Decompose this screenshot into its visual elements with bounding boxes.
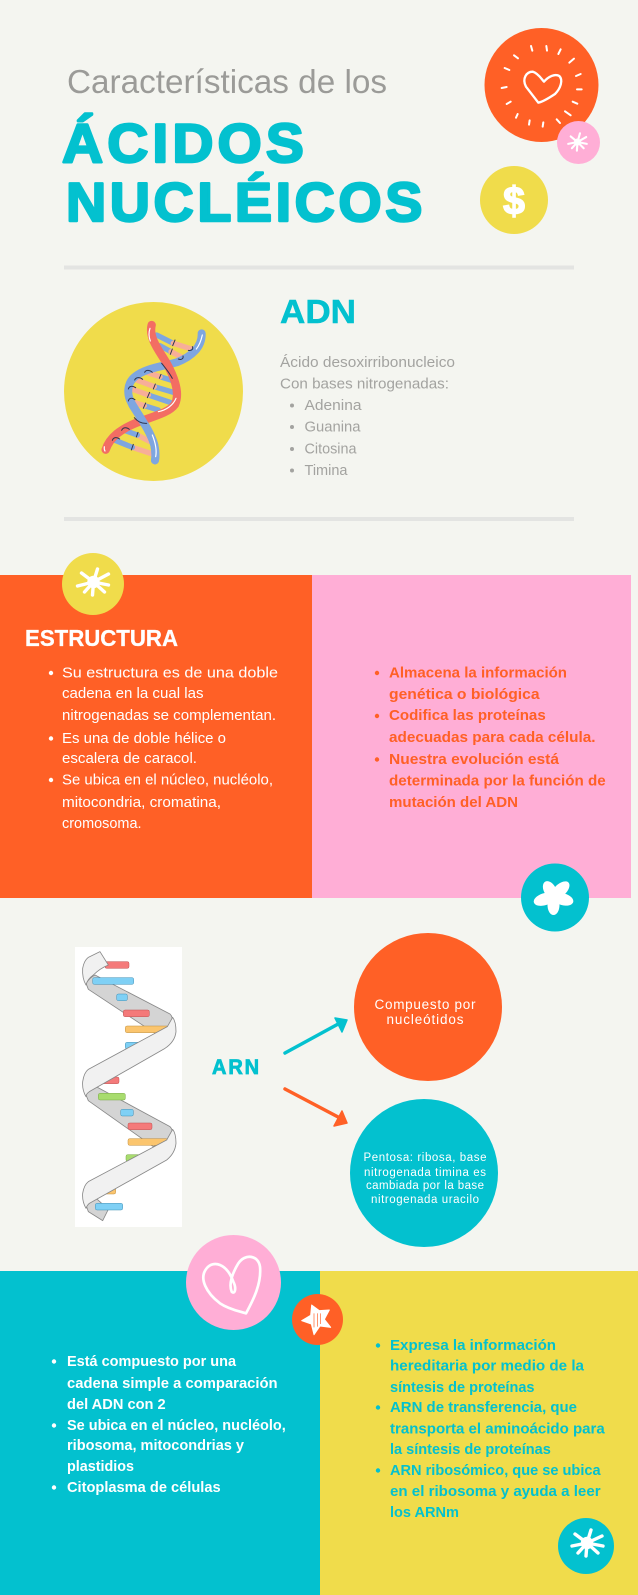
list: ARN funciones: transporta el aminoácido para — [390, 1421, 605, 1438]
icon: teal circle with spark — [558, 1518, 614, 1574]
list: ARN composición: del ADN con 2 — [67, 1396, 166, 1413]
list: ARN funciones: Expresa la información — [390, 1337, 556, 1354]
list: estructura: Su estructura es de una doble — [62, 665, 278, 682]
list: estructura: mitocondria, cromatina, — [62, 794, 221, 811]
panel: ARN composición — [0, 1271, 320, 1595]
list: ARN funciones: en el ribosoma y ayuda a leer — [390, 1483, 601, 1500]
list: funciones ADN: Almacena la información — [389, 665, 567, 682]
circle: pentosa: nitrogenada uracilo — [371, 1194, 479, 1206]
heading line 1: ÁCIDOS — [62, 112, 308, 174]
heading line 2: NUCLÉICOS — [66, 171, 426, 233]
list: funciones ADN: Codifica las proteínas — [389, 707, 546, 724]
red strand — [106, 325, 177, 450]
list: ARN composición: cadena simple a comparación — [67, 1375, 278, 1392]
list: ARN funciones: ARN ribosómico, que se ubica — [390, 1462, 601, 1479]
heading: ADN: ADN — [280, 293, 356, 330]
list: ARN composición: plastidios — [67, 1458, 134, 1475]
list: ARN composición — [52, 1353, 286, 1496]
circle: pentosa: Pentosa: ribosa, base — [364, 1152, 486, 1164]
list: ARN funciones: la síntesis de proteínas — [390, 1441, 551, 1458]
text block: ADN description: Guanina — [304, 418, 361, 435]
list: estructura: escalera de caracol. — [62, 750, 197, 767]
circle: pentosa: nitrogenada timina es — [364, 1167, 486, 1179]
list: ARN funciones: síntesis de proteínas — [390, 1379, 534, 1396]
panel: estructura — [0, 575, 312, 898]
panel: funciones ADN — [312, 575, 631, 898]
arrow: teal — [285, 1018, 347, 1053]
list: ARN funciones: los ARNm — [390, 1504, 459, 1521]
subtitle: Características de los — [67, 63, 387, 100]
list: ARN funciones: ARN de transferencia, que — [390, 1399, 577, 1416]
icon: yellow circle with dollar sign — [480, 166, 548, 234]
icon: yellow circle with spark — [62, 553, 124, 615]
text block: ADN description: Timina — [304, 462, 348, 479]
circle: compuesto por nucleótidos — [354, 933, 502, 1081]
list: ARN funciones: hereditaria por medio de la — [390, 1358, 585, 1374]
text block: ADN description: Ácido desoxirribonucleico — [280, 354, 455, 371]
list: ARN funciones — [376, 1337, 605, 1521]
panel: ARN funciones — [320, 1271, 638, 1595]
circle: pentosa: cambiada por la base — [366, 1180, 484, 1192]
illustration: RNA ribbon — [75, 947, 182, 1227]
list: estructura: Es una de doble hélice o — [62, 730, 226, 747]
icon: pink circle with heart — [186, 1235, 281, 1330]
text block: ADN description — [280, 354, 455, 479]
list: estructura: Se ubica en el núcleo, nucléolo, — [62, 771, 273, 788]
circle: pentosa — [350, 1099, 498, 1247]
list: funciones ADN: Nuestra evolución está — [389, 751, 560, 768]
icon: teal circle with flower — [521, 864, 589, 932]
list: funciones ADN: mutación del ADN — [389, 794, 518, 811]
text block: ADN description: Citosina — [304, 441, 357, 458]
blue strand — [128, 333, 202, 460]
list: ARN composición: Citoplasma de células — [67, 1479, 221, 1496]
list: estructura: nitrogenadas se complementan. — [62, 707, 276, 724]
icon: yellow circle with dollar sign: $ — [503, 180, 525, 223]
list: ARN composición: Está compuesto por una — [67, 1353, 237, 1370]
arrow: orange — [285, 1089, 347, 1126]
list: ARN composición: Se ubica en el núcleo, nucléolo, — [67, 1417, 286, 1434]
icon: pink circle with spark — [557, 121, 600, 164]
text block: ADN description: Adenina — [304, 397, 362, 414]
list: ARN composición: ribosoma, mitocondrias y — [67, 1437, 245, 1454]
title — [62, 63, 426, 233]
heading: estructura: ESTRUCTURA — [25, 625, 178, 651]
list: estructura — [49, 665, 278, 832]
list: funciones ADN: adecuadas para cada célula. — [389, 729, 596, 746]
label: ARN: ARN — [212, 1056, 261, 1079]
icon: orange circle with heart — [484, 28, 598, 142]
blue strand front — [132, 405, 155, 460]
list: funciones ADN — [375, 665, 606, 811]
text block: ADN description: Con bases nitrogenadas: — [280, 376, 449, 393]
circle: compuesto por nucleótidos: nucleótidos — [386, 1012, 464, 1027]
circle: compuesto por nucleótidos: Compuesto por — [374, 997, 476, 1012]
list: estructura: cromosoma. — [62, 815, 142, 832]
icon: orange circle with star — [292, 1294, 343, 1345]
icon: DNA in yellow circle — [64, 302, 243, 481]
list: funciones ADN: genética o biológica — [389, 686, 540, 703]
list: estructura: cadena en la cual las — [62, 685, 204, 702]
list: funciones ADN: determinada por la función de — [389, 772, 606, 790]
